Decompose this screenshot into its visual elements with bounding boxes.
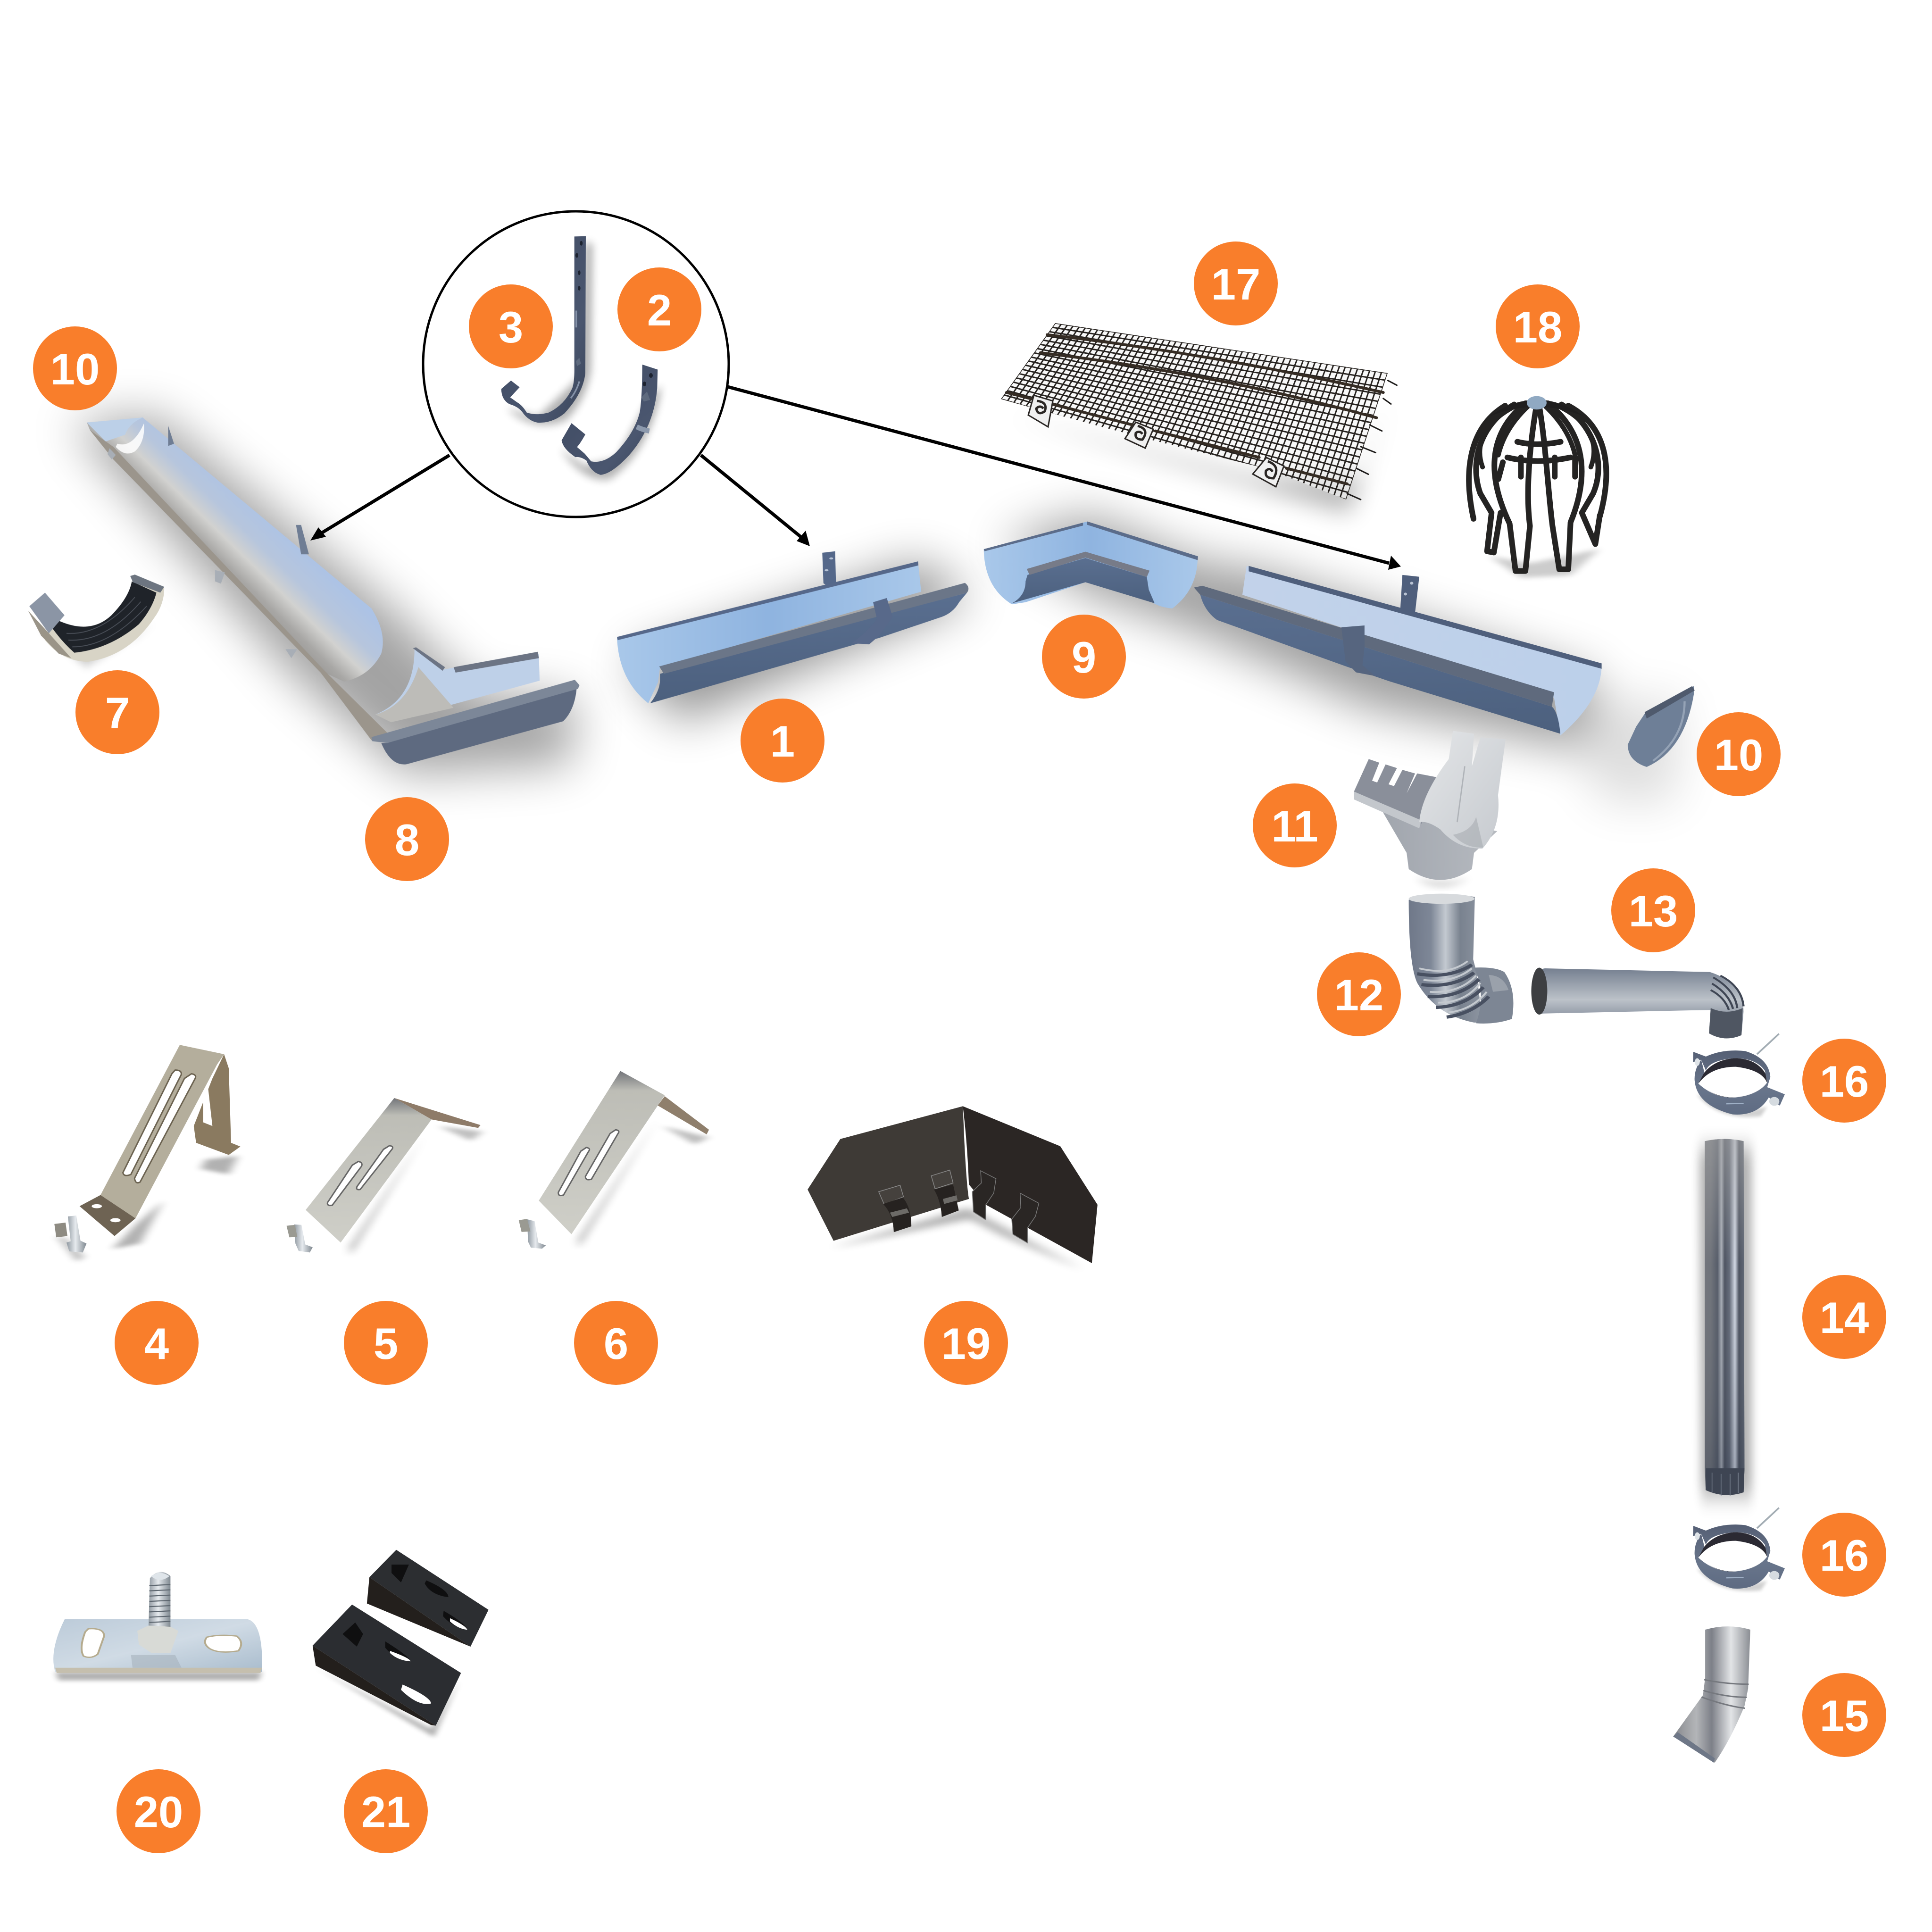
badge 11 bbox=[1253, 783, 1337, 867]
badge 20 bbox=[117, 1769, 200, 1853]
badge 15: 15 bbox=[1820, 1691, 1869, 1740]
leader circle with brackets bbox=[423, 211, 729, 517]
mesh clip right bbox=[1253, 458, 1284, 487]
part: bottom outlet (15) bbox=[1673, 1626, 1750, 1763]
badge 10 right bbox=[1697, 712, 1781, 796]
badge 19: 19 bbox=[941, 1319, 991, 1368]
badge 10 top left bbox=[33, 326, 117, 410]
mesh clip middle bbox=[1125, 422, 1153, 448]
part: downpipe (14) bbox=[1699, 1139, 1752, 1497]
badge 17: 17 bbox=[1211, 259, 1260, 309]
badge 10 top left: 10 bbox=[50, 344, 100, 394]
part: downpipe strainer (18) bbox=[1469, 396, 1606, 578]
badge 21 bbox=[344, 1769, 428, 1853]
badge 4 bbox=[115, 1301, 199, 1385]
part: internal corner (9) bbox=[984, 521, 1198, 608]
badge 15 bbox=[1802, 1673, 1886, 1757]
badge 18: 18 bbox=[1513, 302, 1562, 352]
shadow: centre gutter bbox=[627, 561, 972, 722]
part: upper clamp (16) bbox=[1693, 1034, 1785, 1117]
badge 20: 20 bbox=[134, 1787, 183, 1837]
part: long gutter with end cap and corner (8) bbox=[87, 417, 580, 765]
badge 14 bbox=[1802, 1275, 1886, 1359]
part: fixing plate with bolt (20) bbox=[53, 1572, 262, 1680]
shadow: corner gutter and right gutter bbox=[1000, 514, 1679, 802]
badge 11: 11 bbox=[1271, 801, 1318, 851]
badge 16 upper: 16 bbox=[1820, 1057, 1869, 1106]
badge 13: 13 bbox=[1629, 886, 1678, 936]
badge 9 bbox=[1042, 615, 1126, 699]
part: corner piece (19) bbox=[808, 1106, 1098, 1270]
part: end cap (10) bbox=[1628, 686, 1695, 767]
badge 6 bbox=[574, 1301, 658, 1385]
part: roof bracket (6) bbox=[519, 1071, 709, 1249]
arrow to left gutter bbox=[310, 455, 450, 541]
part: right gutter (1) bbox=[1194, 566, 1602, 735]
part: offset pipe (13) bbox=[1531, 968, 1743, 1038]
badge 2: 2 bbox=[647, 285, 672, 335]
badge 1 bbox=[741, 699, 824, 783]
badge 16 lower bbox=[1802, 1513, 1886, 1597]
badge 13 bbox=[1611, 868, 1695, 952]
badge 4: 4 bbox=[144, 1319, 169, 1368]
arrow to right gutter bbox=[728, 387, 1401, 570]
part: roof bracket (5) bbox=[287, 1098, 483, 1257]
part: gutter connector (7) bbox=[28, 575, 164, 667]
badge 6: 6 bbox=[604, 1319, 628, 1368]
badge 14: 14 bbox=[1820, 1293, 1869, 1342]
badge 18 bbox=[1496, 284, 1580, 368]
shadow: left gutter bbox=[71, 415, 575, 774]
icon: hanger bracket 3 bbox=[501, 236, 593, 425]
badge 3 bbox=[469, 284, 553, 368]
badge 17 bbox=[1194, 242, 1278, 325]
badge 10 right: 10 bbox=[1714, 730, 1763, 780]
badge 7: 7 bbox=[105, 688, 130, 738]
part: roof bracket (4) bbox=[54, 1045, 241, 1262]
badge 5: 5 bbox=[374, 1319, 398, 1368]
badge 1: 1 bbox=[770, 716, 795, 766]
badge 16 upper bbox=[1802, 1039, 1886, 1123]
badge 7 bbox=[75, 670, 159, 754]
badge 12 bbox=[1317, 952, 1401, 1036]
part: outlet (11) bbox=[1354, 731, 1506, 886]
badge 2 bbox=[617, 267, 701, 351]
icon: hanger bracket 2 bbox=[560, 365, 662, 480]
badge 12: 12 bbox=[1334, 970, 1383, 1020]
badge 9: 9 bbox=[1072, 633, 1096, 682]
part: gutter guard mesh (17) bbox=[1001, 323, 1397, 514]
badge 16 lower: 16 bbox=[1820, 1531, 1869, 1580]
part: straight gutter (1) bbox=[617, 551, 968, 703]
arrow to centre gutter bbox=[701, 455, 810, 546]
badge 8 bbox=[365, 797, 449, 881]
badge 3: 3 bbox=[499, 302, 523, 352]
badge 19 bbox=[924, 1301, 1008, 1385]
part: plastic wedges (21) bbox=[313, 1550, 489, 1737]
mesh clip left bbox=[1028, 395, 1053, 427]
badge 8: 8 bbox=[395, 815, 419, 865]
part: elbow (12) bbox=[1409, 894, 1513, 1024]
badge 5 bbox=[344, 1301, 428, 1385]
badge 21: 21 bbox=[361, 1787, 410, 1837]
part: lower clamp (16) bbox=[1693, 1508, 1785, 1591]
